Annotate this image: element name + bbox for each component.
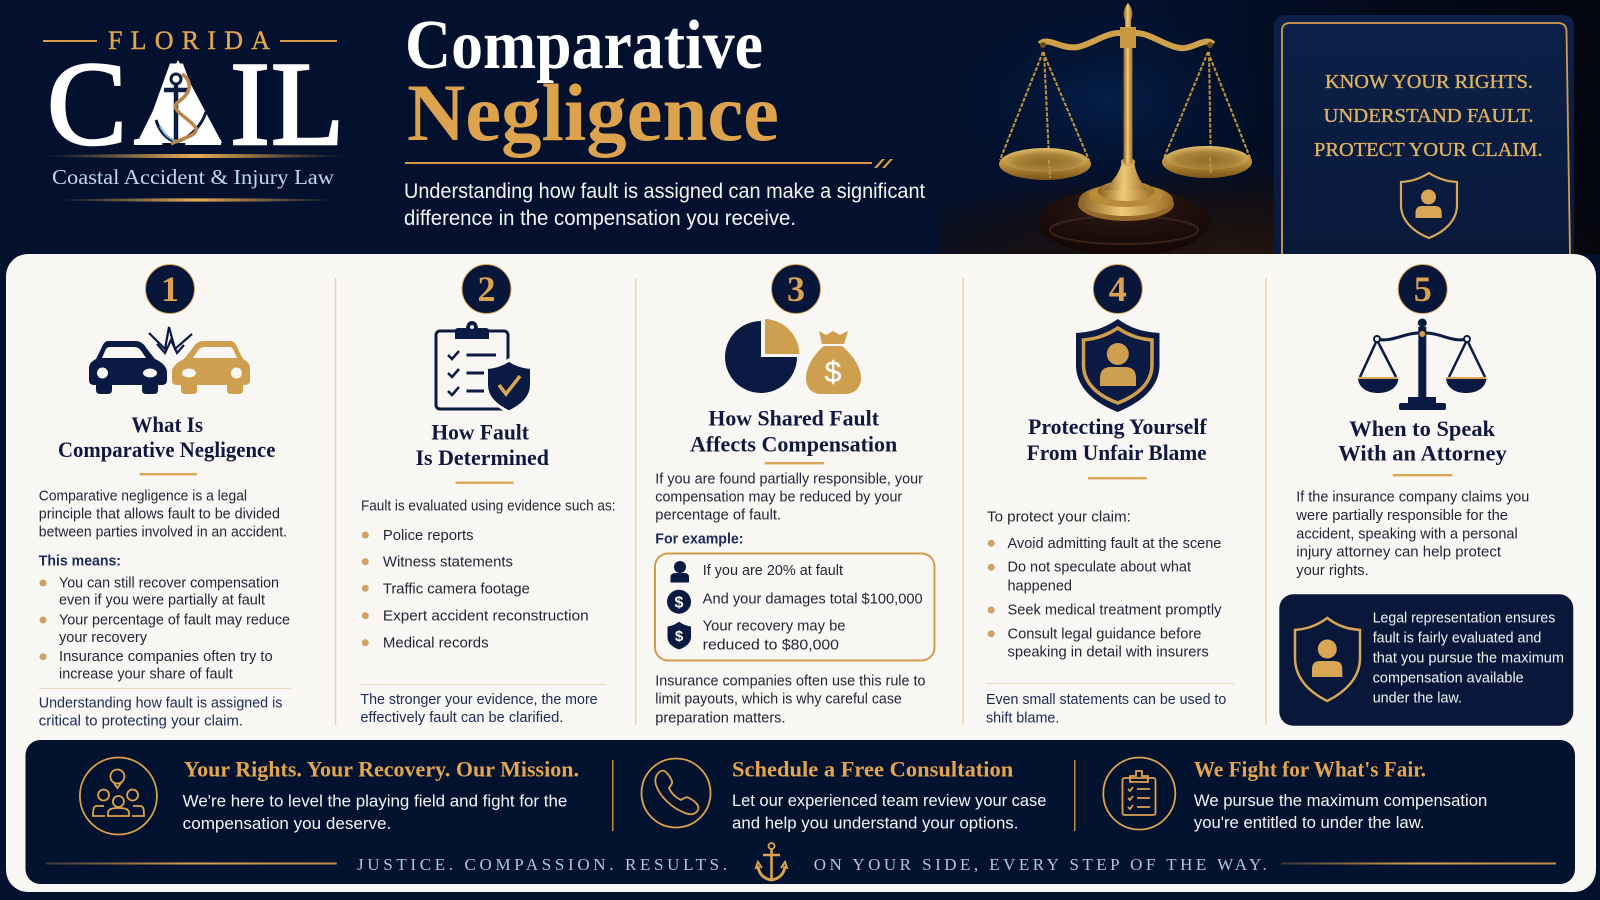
takeaway 4: shift blame. bbox=[986, 710, 1059, 726]
heading 1: What Is bbox=[131, 412, 203, 437]
evidence list: Expert accident reconstruction bbox=[383, 609, 589, 625]
takeaway 1 bbox=[39, 696, 282, 729]
main white card bbox=[6, 254, 1596, 892]
protection list: happened bbox=[1008, 579, 1072, 595]
evidence list: Police reports bbox=[383, 528, 474, 544]
bullet list: even if you were partially at fault bbox=[59, 593, 265, 609]
bullet list: your recovery bbox=[59, 630, 148, 646]
tagline row bbox=[46, 843, 1556, 880]
footer item: free consultation: and help you understand your options. bbox=[732, 814, 1018, 832]
example callout box: And your damages total $100,000 bbox=[703, 591, 923, 607]
example callout box bbox=[655, 554, 934, 660]
plaque: know your rights: PROTECT YOUR CLAIM. bbox=[1314, 139, 1542, 161]
callout: legal representation: Legal representation ensures bbox=[1373, 611, 1555, 627]
heading 1 bbox=[58, 412, 276, 462]
text: for example: For example: bbox=[655, 531, 744, 547]
number badge 4: 4 bbox=[1109, 269, 1127, 309]
icon: dollar shield bbox=[668, 622, 691, 650]
footer item: we fight: We pursue the maximum compensation bbox=[1194, 792, 1487, 810]
footer item: our mission: compensation you deserve. bbox=[183, 815, 391, 833]
callout: legal representation: under the law. bbox=[1373, 691, 1462, 707]
text: attorney advice: accident, speaking with a personal bbox=[1296, 526, 1518, 542]
icon: anchor in logo bbox=[156, 74, 206, 144]
evidence list bbox=[362, 528, 589, 651]
text: partial responsibility: If you are found partially responsible, your bbox=[655, 471, 923, 487]
heading 4 bbox=[1027, 414, 1207, 465]
bullet list: Your percentage of fault may reduce bbox=[59, 612, 290, 628]
footer band bbox=[26, 740, 1575, 884]
icon: dollar shield: $ bbox=[675, 628, 684, 645]
takeaway 4 bbox=[986, 692, 1226, 726]
bullet list bbox=[40, 575, 290, 683]
number badge 1 bbox=[146, 264, 194, 314]
icon: pie chart bbox=[725, 319, 800, 393]
text: definition: between parties involved in an accident. bbox=[39, 525, 287, 541]
bullet list: You can still recover compensation bbox=[59, 575, 279, 591]
heading 2: Is Determined bbox=[416, 445, 549, 470]
heading 1: Comparative Negligence bbox=[58, 437, 276, 462]
footer item: our mission: We're here to level the playing field and fight for the bbox=[183, 793, 567, 811]
title: Negligence bbox=[407, 67, 779, 158]
takeaway 1: critical to protecting your claim. bbox=[39, 713, 243, 729]
column dividers bbox=[336, 278, 1266, 725]
heading 4: Protecting Yourself bbox=[1028, 414, 1207, 439]
heading 3: Affects Compensation bbox=[690, 431, 898, 456]
number badge 5: 5 bbox=[1414, 269, 1432, 309]
icon: clipboard with shield bbox=[436, 321, 532, 412]
icon: people circle bbox=[80, 758, 157, 834]
protection list bbox=[988, 536, 1222, 661]
logo: Florida Cail: Coastal Accident & Injury Law bbox=[52, 165, 335, 189]
heading 5 bbox=[1338, 416, 1507, 466]
text: to protect your claim: To protect your claim: bbox=[987, 510, 1131, 526]
footer item: free consultation: Let our experienced team review your case bbox=[732, 792, 1046, 810]
title bbox=[405, 7, 779, 158]
icon: phone circle bbox=[642, 758, 710, 828]
heading 4: From Unfair Blame bbox=[1027, 440, 1207, 465]
bullet list: increase your share of fault bbox=[59, 667, 233, 683]
takeaway 3 bbox=[655, 674, 926, 726]
title rule bbox=[405, 159, 893, 168]
footer item: we fight bbox=[1103, 757, 1487, 832]
icon: person bbox=[670, 561, 689, 582]
heading 5: With an Attorney bbox=[1338, 441, 1507, 466]
text: this means: This means: bbox=[39, 554, 121, 570]
panel 3: how shared fault affects compensation bbox=[655, 264, 934, 726]
protection list: Avoid admitting fault at the scene bbox=[1008, 536, 1221, 552]
callout: legal representation: that you pursue the maximum bbox=[1373, 651, 1564, 667]
plaque: know your rights bbox=[1274, 15, 1574, 255]
example callout box: reduced to $80,000 bbox=[703, 637, 839, 653]
subtitle bbox=[404, 180, 925, 230]
text: definition: principle that allows fault to be divided bbox=[39, 507, 280, 523]
example callout box: Your recovery may be bbox=[703, 619, 846, 635]
protection list: Seek medical treatment promptly bbox=[1008, 603, 1222, 619]
heading 3 bbox=[690, 406, 898, 456]
text: definition: Comparative negligence is a legal bbox=[39, 489, 247, 505]
takeaway 3: Insurance companies often use this rule to bbox=[655, 674, 926, 690]
text: partial responsibility: compensation may be reduced by your bbox=[655, 489, 902, 505]
example callout box: If you are 20% at fault bbox=[703, 563, 843, 579]
panel 1: what is comparative negligence bbox=[39, 264, 291, 729]
tagline row: JUSTICE. COMPASSION. RESULTS. bbox=[357, 855, 727, 874]
panel 2: how fault is determined bbox=[360, 264, 616, 726]
text: partial responsibility bbox=[655, 471, 923, 523]
protection list: Consult legal guidance before bbox=[1008, 626, 1201, 642]
icon: money bag: $ bbox=[825, 356, 842, 389]
icon: money bag bbox=[806, 331, 861, 394]
icon: plaque shield bbox=[1401, 173, 1457, 238]
tagline row: ON YOUR SIDE, EVERY STEP OF THE WAY. bbox=[814, 855, 1267, 874]
text: evidence intro: Fault is evaluated using evidence such as: bbox=[361, 499, 616, 515]
number badge 2 bbox=[462, 264, 511, 314]
text: attorney advice bbox=[1295, 490, 1529, 579]
logo: Florida Cail: FLORIDA bbox=[108, 26, 270, 55]
scales of justice photo bbox=[999, 3, 1252, 256]
evidence list: Traffic camera footage bbox=[383, 581, 530, 597]
text: attorney advice: If the insurance company claims you bbox=[1296, 490, 1529, 506]
icon: scales bbox=[1358, 318, 1486, 410]
footer item: our mission: Your Rights. Your Recovery. Our Mission. bbox=[184, 757, 579, 782]
panel 5: when to speak with an attorney bbox=[1279, 264, 1573, 726]
evidence list: Medical records bbox=[383, 635, 489, 651]
callout: legal representation: fault is fairly evaluated and bbox=[1373, 631, 1541, 647]
panel 4: protecting yourself from unfair blame bbox=[986, 264, 1234, 726]
evidence list: Witness statements bbox=[383, 554, 513, 570]
number badge 5 bbox=[1398, 264, 1447, 314]
text: partial responsibility: percentage of fault. bbox=[655, 507, 781, 523]
callout: legal representation: compensation available bbox=[1373, 671, 1524, 687]
text: attorney advice: your rights. bbox=[1296, 563, 1369, 579]
heading 5: When to Speak bbox=[1349, 416, 1495, 441]
icon: dollar circle bbox=[667, 590, 691, 614]
text: definition bbox=[39, 489, 287, 541]
plaque: know your rights: UNDERSTAND FAULT. bbox=[1324, 105, 1534, 127]
subtitle: difference in the compensation you receive. bbox=[404, 207, 796, 230]
icon: dollar circle: $ bbox=[675, 594, 684, 612]
takeaway 2: effectively fault can be clarified. bbox=[360, 710, 563, 726]
icon: shield person bbox=[1076, 319, 1160, 412]
bullet list: Insurance companies often try to bbox=[59, 649, 273, 665]
takeaway 4: Even small statements can be used to bbox=[986, 692, 1226, 708]
text: attorney advice: injury attorney can help protect bbox=[1296, 545, 1501, 561]
heading 3: How Shared Fault bbox=[708, 406, 879, 431]
footer item: free consultation bbox=[642, 757, 1046, 832]
footer item: we fight: We Fight for What's Fair. bbox=[1194, 757, 1426, 782]
protection list: Do not speculate about what bbox=[1008, 560, 1191, 576]
text: attorney advice: were partially responsible for the bbox=[1295, 508, 1508, 524]
icon: anchor bbox=[756, 843, 788, 880]
footer item: free consultation: Schedule a Free Consultation bbox=[732, 757, 1013, 782]
takeaway 3: preparation matters. bbox=[655, 710, 786, 726]
logo: Florida Cail: CAIL bbox=[47, 37, 344, 170]
number badge 4 bbox=[1093, 264, 1142, 314]
footer item: our mission bbox=[80, 757, 579, 834]
heading 2 bbox=[416, 419, 549, 470]
takeaway 2 bbox=[360, 692, 598, 726]
number badge 2: 2 bbox=[478, 269, 496, 309]
heading 2: How Fault bbox=[431, 419, 529, 444]
number badge 3 bbox=[772, 264, 820, 314]
title: Comparative bbox=[405, 7, 763, 84]
icon: clipboard circle bbox=[1103, 758, 1175, 830]
plaque: know your rights: KNOW YOUR RIGHTS. bbox=[1325, 71, 1533, 93]
icon: car crash bbox=[89, 327, 250, 394]
subtitle: Understanding how fault is assigned can make a significant bbox=[404, 180, 925, 203]
number badge 1: 1 bbox=[161, 269, 179, 309]
footer item: we fight: you're entitled to under the law. bbox=[1194, 814, 1424, 832]
takeaway 1: Understanding how fault is assigned is bbox=[39, 696, 282, 712]
callout: legal representation bbox=[1279, 594, 1573, 726]
protection list: speaking in detail with insurers bbox=[1008, 645, 1209, 661]
number badge 3: 3 bbox=[787, 269, 805, 309]
icon: outlined shield person bbox=[1295, 618, 1360, 701]
takeaway 3: limit payouts, which is why careful case bbox=[655, 692, 902, 708]
takeaway 2: The stronger your evidence, the more bbox=[360, 692, 598, 708]
